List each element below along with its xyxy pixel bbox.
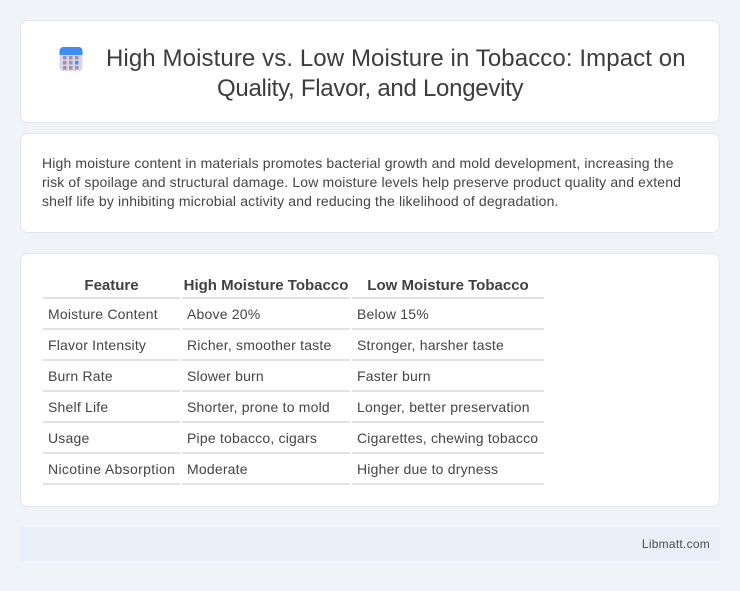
comparison table (43, 297, 544, 485)
low moisture column: Below 15% (357, 306, 429, 322)
high moisture column (187, 306, 331, 477)
high moisture column: Moderate (187, 461, 248, 477)
table header: feature: Feature (84, 277, 139, 294)
high moisture column: Pipe tobacco, cigars (187, 430, 317, 446)
low moisture column: Longer, better preservation (357, 399, 530, 415)
intro text: shelf life by inhibiting microbial activity and reducing the likelihood of degradation. (42, 193, 559, 209)
high moisture column: Shorter, prone to mold (187, 399, 330, 415)
title: Quality, Flavor, and Longevity (217, 75, 523, 102)
feature column: Nicotine Absorption (48, 461, 175, 477)
footer source text: Libmatt.com (642, 537, 710, 551)
feature column (48, 306, 175, 477)
low moisture column: Cigarettes, chewing tobacco (357, 430, 538, 446)
high moisture column: Richer, smoother taste (187, 337, 331, 353)
low moisture column: Faster burn (357, 368, 431, 384)
feature column: Flavor Intensity (48, 337, 146, 353)
feature column: Burn Rate (48, 368, 113, 384)
high moisture column: Slower burn (187, 368, 264, 384)
intro text: risk of spoilage and structural damage. Low moisture levels help preserve product quality and extend (42, 174, 681, 190)
low moisture column: Stronger, harsher taste (357, 337, 504, 353)
feature column: Usage (48, 430, 89, 446)
footer bar (20, 527, 720, 561)
high moisture column: Above 20% (187, 306, 260, 322)
icon: calendar (60, 47, 82, 71)
table header: high moisture: High Moisture Tobacco (184, 277, 348, 294)
low moisture column (357, 306, 538, 477)
feature column: Shelf Life (48, 399, 108, 415)
feature column: Moisture Content (48, 306, 158, 322)
header panel (20, 20, 720, 123)
intro text (42, 155, 681, 209)
table header: low moisture: Low Moisture Tobacco (367, 277, 529, 294)
table panel (20, 253, 720, 507)
title: High Moisture vs. Low Moisture in Tobacco: Impact on (106, 45, 686, 72)
low moisture column: Higher due to dryness (357, 461, 498, 477)
intro text: High moisture content in materials promotes bacterial growth and mold development, increasing the (42, 155, 674, 171)
intro panel (20, 133, 720, 233)
title (106, 45, 686, 102)
